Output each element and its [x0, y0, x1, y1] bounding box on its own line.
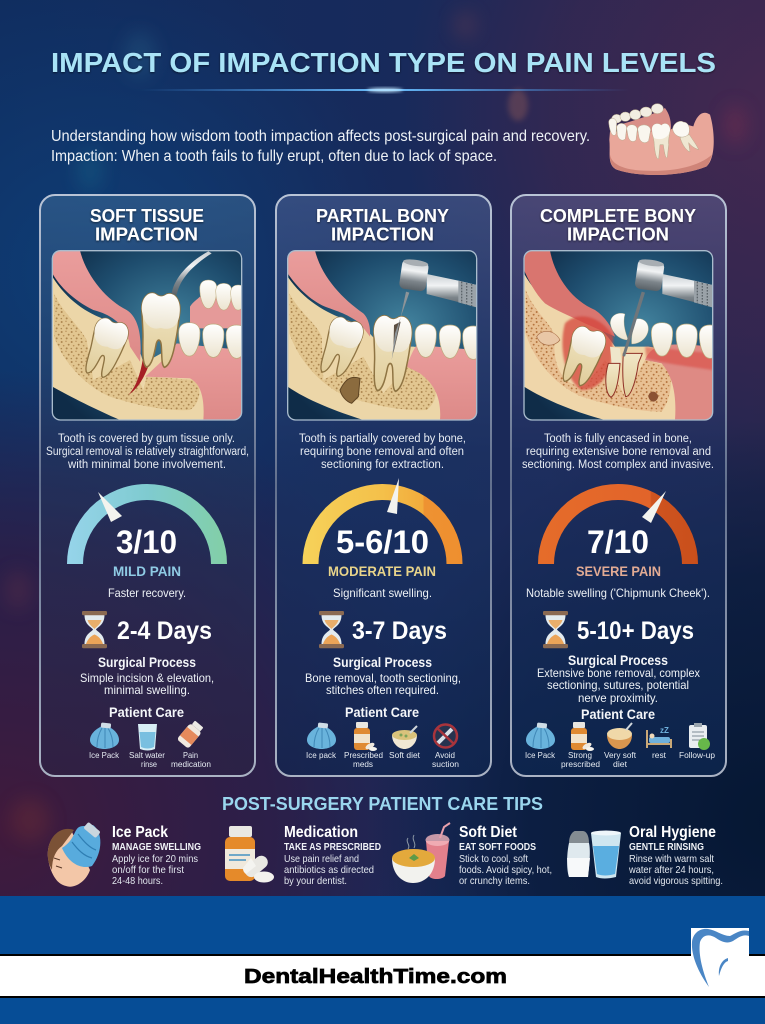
icon: prescribed meds: meds — [353, 759, 373, 769]
description: Tooth is fully encased in bone, — [544, 433, 692, 445]
surgical process — [537, 652, 700, 705]
tip: ice pack: on/off for the first — [112, 864, 184, 876]
gauge: 5-6/10 — [310, 478, 454, 579]
surgical process: stitches often required. — [326, 683, 439, 697]
icon: ice pack: Ice Pack — [89, 750, 120, 760]
heading — [90, 205, 204, 244]
gauge: 3/10 — [75, 492, 219, 579]
tip: soft diet: EAT SOFT FOODS — [459, 841, 536, 853]
tip: ice pack — [48, 822, 201, 887]
tip: medication: TAKE AS PRESCRIBED — [284, 841, 381, 853]
intro text: Understanding how wisdom tooth impaction affects post-surgical pain and recovery. — [51, 128, 590, 145]
illustration: partial bony impaction — [288, 251, 484, 420]
surgical process: Surgical Process — [98, 654, 196, 670]
pain note: Faster recovery. — [108, 586, 186, 600]
icon: avoid suction: suction — [432, 759, 459, 769]
icon: prescribed meds — [344, 722, 383, 769]
icon: salt water rinse: rinse — [141, 759, 157, 769]
icon: strong prescribed — [561, 722, 600, 769]
icon: very soft diet — [604, 723, 637, 769]
footer band — [0, 896, 765, 1024]
patient care: Patient Care — [345, 704, 419, 720]
icon: salt and water glass — [567, 830, 621, 878]
heading: PARTIAL BONY — [316, 205, 450, 226]
icon: salt water rinse — [129, 724, 165, 769]
heading: SOFT TISSUE — [90, 205, 204, 226]
description: requiring extensive bone removal and — [526, 446, 711, 458]
patient care: Patient Care — [109, 704, 184, 720]
tip: medication: antibiotics as directed — [284, 864, 374, 876]
description: Tooth is covered by gum tissue only. — [58, 433, 235, 445]
title: IMPACT OF IMPACTION TYPE ON PAIN LEVELS — [51, 47, 716, 78]
recovery time: 5-10+ Days — [577, 617, 694, 645]
patient care — [306, 704, 459, 769]
description: Tooth is partially covered by bone, — [299, 433, 466, 445]
tip: oral hygiene: GENTLE RINSING — [629, 841, 704, 853]
tip: soft diet: Stick to cool, soft — [459, 853, 528, 865]
icon: strong prescribed: prescribed — [561, 759, 600, 769]
surgical process: Simple incision & elevation, — [80, 671, 214, 685]
icon: ice pack: Ice pack — [306, 750, 337, 760]
heading: COMPLETE BONY — [540, 205, 697, 226]
icon: ice pack — [306, 722, 337, 760]
heading — [540, 205, 697, 244]
section heading: post-surgery tips: POST-SURGERY PATIENT CARE TIPS — [222, 794, 543, 814]
icon: follow-up clipboard — [679, 723, 715, 760]
recovery time — [543, 611, 694, 648]
description: Surgical removal is relatively straightforward, — [46, 446, 249, 458]
patient care: Patient Care — [581, 706, 655, 722]
tip: soft diet: Soft Diet — [459, 824, 518, 841]
description — [46, 433, 249, 471]
icon: rest: zZ — [660, 726, 669, 735]
description: requiring bone removal and often — [300, 446, 464, 458]
icon: rest — [647, 726, 671, 760]
icon: ice pack: Ice Pack — [525, 750, 556, 760]
icon: prescribed meds: Prescribed — [344, 750, 383, 760]
tip: oral hygiene — [567, 824, 723, 887]
illustration: soft tissue impaction — [52, 251, 247, 420]
icon: pain medication — [171, 719, 211, 769]
heading: IMPACTION — [331, 224, 434, 244]
icon: soup and smoothie — [392, 823, 450, 883]
tip: soft diet: foods. Avoid spicy, hot, — [459, 864, 552, 876]
panel: soft tissue impaction — [40, 195, 255, 776]
pain note: Significant swelling. — [333, 586, 432, 600]
icon: strong prescribed: Strong — [568, 750, 592, 760]
icon: very soft diet: diet — [613, 759, 628, 769]
tip: oral hygiene: Rinse with warm salt — [629, 853, 714, 865]
surgical process — [80, 654, 214, 697]
tip: medication: by your dentist. — [284, 875, 347, 887]
recovery time — [319, 611, 447, 648]
tip: medication: Medication — [284, 824, 358, 841]
surgical process: nerve proximity. — [578, 691, 658, 705]
tip: soft diet: or crunchy items. — [459, 875, 530, 887]
icon: soft diet: Soft diet — [389, 750, 421, 760]
gauge: 5-6/10: 5-6/10 — [336, 524, 429, 560]
icon: face with ice pack — [48, 822, 101, 887]
surgical process: minimal swelling. — [104, 683, 190, 697]
intro text — [51, 128, 590, 165]
gauge: 5-6/10: MODERATE PAIN — [328, 563, 436, 579]
tip: oral hygiene: Oral Hygiene — [629, 824, 716, 841]
surgical process: Surgical Process — [333, 654, 432, 670]
title glow line — [140, 88, 630, 92]
tip: ice pack: MANAGE SWELLING — [112, 841, 201, 853]
icon: pill bottle — [225, 826, 274, 882]
panel: partial bony impaction — [276, 195, 491, 776]
gauge: 3/10: 3/10 — [116, 524, 177, 560]
icon: pain medication: Pain — [183, 750, 198, 760]
website address: DentalHealthTime.com — [244, 966, 507, 988]
surgical process: Surgical Process — [568, 652, 668, 668]
description: sectioning. Most complex and invasive. — [522, 459, 714, 471]
heading — [316, 205, 450, 244]
icon: avoid suction — [432, 724, 459, 769]
recovery time: 2-4 Days — [117, 617, 212, 645]
surgical process: Extensive bone removal, complex — [537, 666, 700, 680]
intro text: Impaction: When a tooth fails to fully erupt, often due to lack of space. — [51, 148, 497, 165]
description: with minimal bone involvement. — [67, 459, 226, 471]
icon: jaw model — [609, 104, 714, 175]
tip: soft diet — [392, 823, 552, 887]
icon: avoid suction: Avoid — [435, 750, 455, 760]
tip: ice pack: Apply ice for 20 mins — [112, 853, 198, 865]
logo: tooth — [691, 928, 749, 987]
description — [299, 433, 466, 471]
surgical process — [305, 654, 461, 697]
icon: ice pack — [525, 722, 556, 760]
heading: IMPACTION — [567, 224, 669, 244]
recovery time: 3-7 Days — [352, 617, 447, 645]
patient care — [525, 706, 715, 769]
description — [522, 433, 714, 471]
gauge: 7/10 — [546, 491, 690, 579]
tip: ice pack: 24-48 hours. — [112, 875, 163, 887]
heading: IMPACTION — [95, 224, 198, 244]
tip: oral hygiene: water after 24 hours, — [628, 864, 714, 876]
gauge: 7/10: 7/10 — [587, 524, 649, 560]
surgical process: Bone removal, tooth sectioning, — [305, 671, 461, 685]
description: sectioning for extraction. — [321, 459, 444, 471]
illustration: complete bony impaction — [524, 251, 721, 420]
gauge: 7/10: SEVERE PAIN — [576, 563, 661, 579]
gauge: 3/10: MILD PAIN — [113, 563, 181, 579]
tip: ice pack: Ice Pack — [112, 824, 168, 841]
patient care — [89, 704, 211, 769]
tip: oral hygiene: avoid vigorous spitting. — [629, 875, 723, 887]
icon: soft diet — [389, 726, 421, 760]
panel: complete bony impaction — [511, 195, 726, 776]
pain note: Notable swelling ('Chipmunk Cheek'). — [526, 586, 710, 600]
tip: medication — [225, 824, 381, 887]
recovery time — [82, 611, 212, 648]
icon: follow-up clipboard: Follow-up — [679, 750, 715, 760]
icon: rest: rest — [652, 750, 667, 760]
icon: salt water rinse: Salt water — [129, 750, 165, 760]
icon: very soft diet: Very soft — [604, 750, 637, 760]
tip: medication: Use pain relief and — [284, 853, 359, 865]
icon: pain medication: medication — [171, 759, 211, 769]
surgical process: sectioning, sutures, potential — [547, 678, 689, 692]
